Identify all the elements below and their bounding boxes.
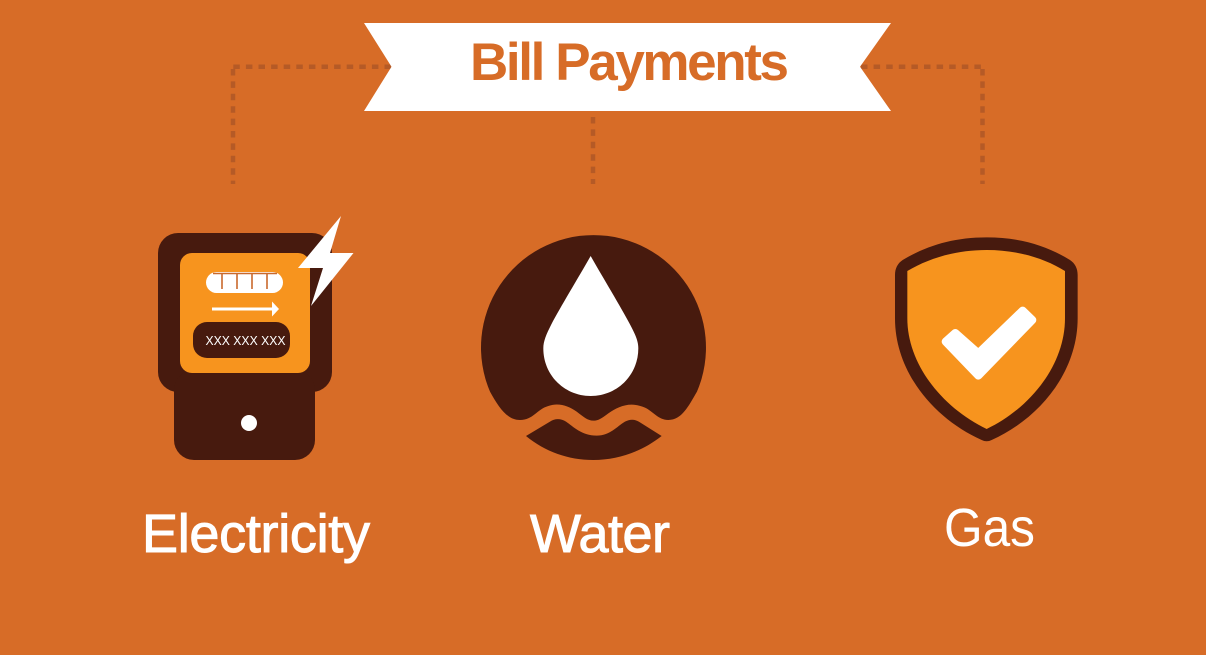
- label: water: Water: [530, 504, 670, 564]
- label: electricity: Electricity: [142, 504, 370, 564]
- title: Bill Payments: [470, 33, 789, 92]
- icon: gas safety shield: [895, 237, 1078, 441]
- icon: electricity meter: [158, 216, 354, 460]
- label: gas: Gas: [944, 498, 1035, 558]
- icon: water drop: [481, 235, 706, 460]
- connector: banner to water: [591, 117, 595, 184]
- connector: banner to gas: [861, 67, 984, 184]
- title banner: [364, 23, 891, 111]
- connector: banner to electricity: [231, 67, 391, 184]
- icon: electricity meter: XXX XXX XXX: [206, 333, 286, 348]
